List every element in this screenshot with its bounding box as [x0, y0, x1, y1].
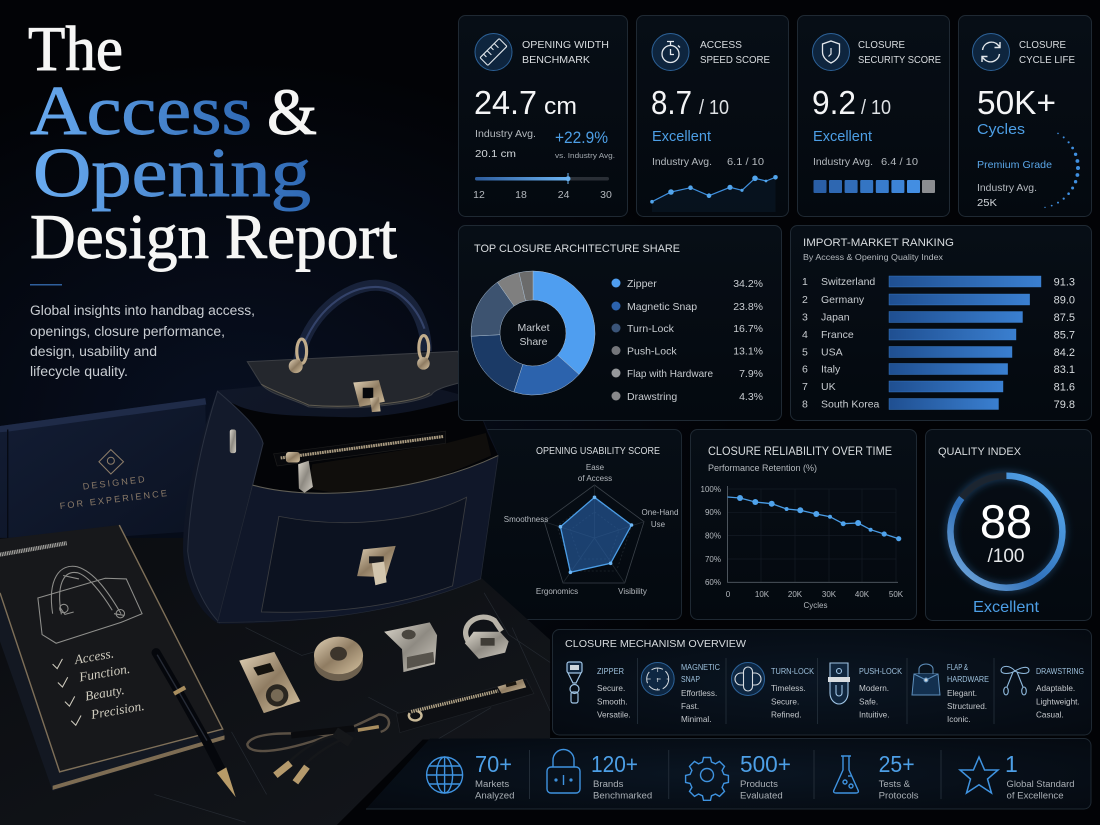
line chart: 30K — [822, 590, 837, 599]
hardware: turn lock — [384, 622, 437, 672]
title rule — [30, 284, 62, 286]
title: Access — [30, 73, 252, 150]
panel: closure mechanism overview — [552, 630, 1092, 735]
line chart: 100% — [701, 485, 721, 494]
score blocks — [814, 180, 935, 193]
slider gauge: 24 — [558, 189, 570, 201]
drawstring text: DRAWSTRING — [1036, 667, 1084, 676]
stat: markets: Markets — [475, 779, 509, 790]
icon: turn-lock — [732, 662, 764, 696]
turn-lock text: Timeless. — [771, 684, 806, 693]
value — [812, 84, 891, 121]
subtitle: lifecycle quality. — [30, 364, 128, 379]
heading — [858, 39, 941, 66]
ring gauge — [950, 476, 1062, 588]
radar chart: Use — [651, 520, 666, 529]
industry average — [652, 157, 764, 168]
value: / 10 — [699, 97, 729, 119]
radar chart: Smoothness — [504, 515, 548, 524]
hardware: round snap — [314, 637, 363, 681]
heading: CLOSURE — [858, 39, 905, 51]
push-lock text: Safe. — [859, 698, 878, 706]
drawstring text — [1036, 667, 1084, 720]
icon: flap and hardware — [912, 664, 940, 695]
magnetic snap text: Effortless. — [681, 689, 717, 698]
title: Opening — [33, 135, 311, 212]
panel: top closure architecture share — [458, 226, 782, 420]
heading: SECURITY SCORE — [858, 54, 941, 66]
value — [474, 84, 577, 121]
icon: flask — [834, 756, 858, 793]
icon: stopwatch — [652, 34, 689, 70]
stat: global standard: Global Standard — [1006, 779, 1074, 790]
magnetic snap text: Minimal. — [681, 715, 711, 724]
legend: Zipper — [627, 278, 657, 290]
industry average: 20.1 cm — [475, 148, 516, 160]
score: /100 — [988, 546, 1024, 567]
legend: 13.1% — [733, 346, 763, 358]
legend — [612, 278, 763, 403]
magnetic snap text: SNAP — [681, 675, 700, 684]
industry average: 6.1 / 10 — [727, 157, 764, 168]
stat: tests: Tests & — [879, 779, 911, 790]
line chart: 40K — [855, 590, 870, 599]
ranking bars: 83.1 — [1054, 364, 1075, 376]
magnetic snap text: Fast. — [681, 702, 699, 711]
legend: Drawstring — [627, 391, 677, 403]
heading: QUALITY INDEX — [938, 446, 1022, 458]
slider gauge: 30 — [600, 189, 612, 201]
legend: Flap with Hardware — [627, 368, 713, 380]
notebook with bag sketch: Precision. — [89, 698, 145, 722]
legend: 4.3% — [739, 391, 763, 403]
line chart: 70% — [705, 555, 721, 564]
stat: brands: Brands — [593, 779, 624, 790]
turn-lock text: TURN-LOCK — [771, 667, 815, 676]
zipper text: Smooth. — [597, 698, 628, 706]
radar chart: Ergonomics — [536, 587, 578, 596]
handbag — [183, 285, 499, 624]
flap and hardware text: HARDWARE — [947, 675, 989, 684]
notebook with bag sketch: Function. — [77, 661, 131, 685]
line chart: 80% — [705, 532, 721, 540]
stat: global standard — [1005, 751, 1074, 802]
heading: CLOSURE — [1019, 39, 1066, 51]
drawstring cord — [247, 714, 389, 782]
ranking bars: Japan — [821, 312, 850, 324]
score: 88 — [980, 495, 1032, 548]
subtitle: openings, closure performance, — [30, 324, 225, 339]
zipper text: ZIPPER — [597, 667, 624, 676]
radar chart — [504, 463, 678, 596]
stat: markets — [475, 751, 514, 802]
icon: ruler — [475, 34, 512, 70]
industry average: Industry Avg. — [475, 129, 536, 140]
flap and hardware text — [947, 663, 989, 724]
drawstring text: Casual. — [1036, 710, 1064, 720]
heading: CLOSURE RELIABILITY OVER TIME — [708, 446, 892, 458]
ranking bars: 1 — [802, 276, 808, 288]
heading: CYCLE LIFE — [1019, 54, 1075, 66]
panel: summary statistics — [366, 738, 1091, 809]
stat: products: Evaluated — [740, 790, 783, 802]
ranking bars: 87.5 — [1054, 312, 1075, 324]
panel: opening width benchmark — [458, 16, 628, 216]
panel: import-market ranking — [790, 226, 1092, 420]
grade: Premium Grade — [977, 159, 1052, 171]
value: 50K+ — [977, 84, 1056, 121]
push-lock text — [859, 667, 903, 720]
ranking bars: 4 — [802, 329, 808, 341]
ranking bars: 7 — [802, 381, 808, 393]
ranking bars: Germany — [821, 294, 865, 306]
push-lock text: Intuitive. — [859, 710, 890, 720]
ranking bars: 3 — [802, 312, 808, 324]
line chart: 10K — [755, 590, 770, 599]
subtitle — [30, 303, 255, 379]
legend: Turn-Lock — [627, 323, 675, 335]
radar chart: of Access — [578, 474, 612, 483]
unit: Cycles — [977, 121, 1025, 138]
slider gauge: 12 — [473, 189, 485, 201]
heading: TOP CLOSURE ARCHITECTURE SHARE — [474, 243, 680, 255]
notebook with bag sketch — [0, 525, 225, 791]
legend: 34.2% — [733, 278, 763, 290]
navy presentation box — [0, 398, 208, 544]
drawstring text: Adaptable. — [1036, 684, 1075, 693]
legend: 23.8% — [733, 301, 763, 313]
icon: shield — [812, 34, 850, 70]
stat: markets: 70+ — [475, 751, 512, 777]
icon: cycle arrows — [972, 34, 1010, 70]
panel: quality index — [926, 430, 1092, 620]
comparison: +22.9% — [555, 129, 608, 147]
heading — [700, 39, 770, 66]
push-lock text: Modern. — [859, 684, 889, 693]
flap and hardware text: Elegant. — [947, 689, 977, 698]
heading: SPEED SCORE — [700, 54, 770, 66]
notebook with bag sketch: Access. — [72, 646, 115, 667]
pen — [156, 653, 236, 797]
hardware: plate — [239, 652, 300, 713]
icon: magnetic snap — [641, 662, 674, 696]
navy presentation box: DESIGNED — [82, 474, 147, 492]
comparison — [555, 129, 615, 160]
dividers — [638, 658, 994, 724]
ranking bars: 81.6 — [1054, 382, 1075, 394]
ranking bars: 8 — [802, 398, 808, 410]
icon: drawstring — [1001, 666, 1029, 695]
drawstring text: Lightweight. — [1036, 698, 1080, 706]
line chart: 20K — [788, 590, 803, 599]
legend: Push-Lock — [627, 346, 677, 358]
flap and hardware text: Iconic. — [947, 715, 971, 724]
stat: products — [740, 751, 791, 802]
title — [28, 13, 397, 272]
magnetic snap text — [681, 663, 720, 724]
push-lock text: PUSH-LOCK — [859, 667, 903, 676]
heading — [522, 39, 609, 66]
heading: opening usability score: OPENING USABILITY SCORE — [536, 446, 660, 457]
subheading: By Access & Opening Quality Index — [803, 252, 944, 262]
icon: globe — [427, 757, 463, 793]
slider gauge: 18 — [515, 189, 527, 201]
zipper text — [597, 667, 631, 720]
value: / 10 — [861, 97, 891, 119]
navy presentation box: FOR EXPERIENCE — [59, 488, 170, 511]
line chart: 50K — [889, 590, 904, 599]
icon: star — [960, 757, 998, 793]
ranking bars: 89.0 — [1054, 294, 1075, 306]
ranking bars: Switzerland — [821, 276, 875, 288]
ranking bars: 91.3 — [1054, 276, 1075, 288]
zipper text: Versatile. — [597, 710, 631, 720]
photo: handbag, notebook and hardware on marble — [0, 285, 550, 825]
ranking bars: 79.8 — [1054, 399, 1075, 411]
heading: OPENING WIDTH — [522, 39, 609, 51]
panel: closure security score — [798, 16, 950, 216]
ranking bars: 85.7 — [1054, 330, 1075, 342]
line chart: 60% — [705, 578, 721, 587]
stat: markets: Analyzed — [475, 790, 514, 802]
value: 24.7 — [474, 84, 537, 121]
legend: 7.9% — [739, 368, 763, 380]
marble surface — [0, 538, 550, 825]
zipper strip — [396, 679, 534, 733]
rating: Excellent — [652, 129, 711, 145]
icon: push-lock — [828, 663, 850, 704]
heading — [1019, 39, 1075, 66]
slider gauge — [473, 173, 612, 201]
subheading: Performance Retention (%) — [708, 463, 817, 473]
heading: IMPORT-MARKET RANKING — [803, 237, 954, 249]
rating: Excellent — [813, 129, 872, 145]
industry average — [813, 157, 918, 168]
industry average — [475, 129, 536, 160]
heading: BENCHMARK — [522, 54, 590, 66]
turn-lock text: Refined. — [771, 710, 802, 720]
panel: opening usability score — [470, 430, 682, 620]
stat: tests — [879, 751, 919, 802]
icon: gear — [686, 758, 728, 800]
stat: products: 500+ — [740, 751, 791, 777]
heading: ACCESS — [700, 39, 742, 51]
ranking bars — [802, 276, 1075, 411]
zipper text: Secure. — [597, 684, 625, 693]
value: cm — [544, 93, 577, 120]
ranking bars: South Korea — [821, 398, 880, 410]
value: 8.7 — [651, 84, 692, 121]
stat: tests: Protocols — [879, 790, 919, 802]
icon: padlock — [547, 750, 580, 793]
stat: tests: 25+ — [879, 751, 915, 777]
heading: CLOSURE MECHANISM OVERVIEW — [565, 638, 746, 650]
ranking bars: Italy — [821, 364, 841, 376]
sparkline — [650, 175, 778, 212]
title: Design Report — [30, 201, 397, 272]
dotted arc gauge — [1044, 133, 1080, 208]
ranking bars: USA — [821, 346, 843, 358]
industry average: 25K — [977, 198, 997, 209]
stat: brands: Benchmarked — [593, 790, 652, 802]
value — [651, 84, 729, 121]
industry average: Industry Avg. — [813, 157, 873, 168]
legend: Magnetic Snap — [627, 301, 697, 313]
donut centre label: Share — [519, 336, 548, 348]
magnetic snap text: MAGNETIC — [681, 663, 720, 672]
panel: closure reliability over time — [690, 430, 916, 620]
donut centre label: Market — [517, 322, 550, 334]
turn-lock text: Secure. — [771, 698, 799, 706]
stat: global standard: 1 — [1005, 751, 1018, 777]
panel: closure cycle life — [958, 16, 1092, 216]
subtitle: Global insights into handbag access, — [30, 303, 255, 318]
ranking bars: 2 — [802, 294, 808, 306]
comparison: vs. Industry Avg. — [555, 151, 615, 160]
title: The — [28, 13, 123, 84]
rating: Excellent — [973, 599, 1040, 616]
radar chart: One-Hand — [642, 508, 678, 517]
notebook with bag sketch: Beauty. — [84, 682, 125, 704]
ranking bars: France — [821, 329, 854, 341]
flap and hardware text: FLAP & — [947, 663, 969, 672]
flap and hardware text: Structured. — [947, 702, 987, 711]
industry average: 6.4 / 10 — [881, 157, 918, 168]
panel: access speed score — [636, 16, 788, 216]
stat: brands — [591, 751, 652, 802]
ranking bars: 5 — [802, 346, 808, 358]
legend: 16.7% — [733, 323, 763, 335]
donut chart — [471, 271, 595, 395]
ranking bars: UK — [821, 381, 836, 393]
radar chart: Visibility — [618, 587, 647, 596]
line chart — [701, 485, 904, 610]
line chart: 90% — [705, 508, 721, 517]
turn-lock text — [771, 667, 815, 720]
industry average: Industry Avg. — [652, 157, 712, 168]
ranking bars: 6 — [802, 364, 808, 376]
radar chart: Ease — [586, 463, 605, 472]
industry average — [977, 183, 1037, 209]
dividers — [530, 750, 941, 799]
ranking bars: 84.2 — [1054, 347, 1075, 359]
icon: zipper — [567, 662, 582, 703]
title: & — [267, 76, 317, 149]
stat: brands: 120+ — [591, 751, 638, 777]
line chart: 0 — [726, 590, 731, 599]
stat: global standard: of Excellence — [1006, 790, 1064, 802]
stat: products: Products — [740, 779, 778, 790]
line chart: Cycles — [803, 601, 828, 610]
donut centre label — [517, 322, 550, 348]
industry average: Industry Avg. — [977, 183, 1037, 194]
hardware: padlock — [465, 617, 509, 659]
value: 9.2 — [812, 84, 856, 121]
subtitle: design, usability and — [30, 344, 157, 359]
